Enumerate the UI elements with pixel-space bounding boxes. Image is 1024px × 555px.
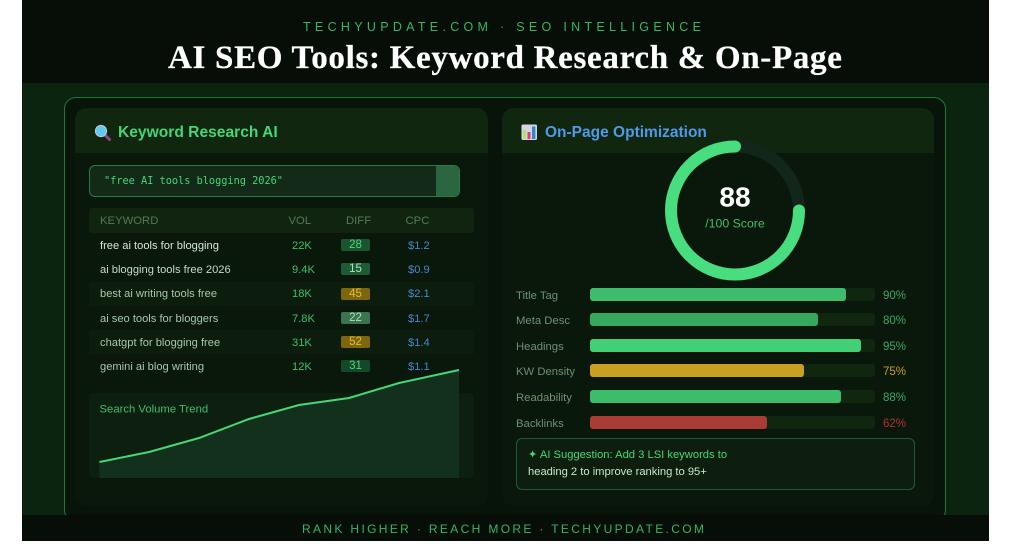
metric: kw density: [516, 364, 906, 378]
trend chart: [99, 369, 460, 478]
search box: [89, 165, 460, 197]
ai suggestion callout: ✦ AI Suggestion: Add 3 LSI keywords to: [528, 449, 727, 461]
search button: [436, 166, 459, 196]
row 4: $1.7: [408, 313, 430, 325]
background: [22, 83, 988, 515]
trend chart: Search Volume Trend: [100, 404, 208, 416]
outer dashboard frame: [64, 97, 946, 522]
row 5: [89, 330, 474, 354]
row 6: $1.1: [408, 361, 430, 373]
poster: KW Density: [516, 366, 575, 378]
poster: 90%: [883, 290, 906, 302]
row 4: 7.8K: [292, 313, 315, 325]
row 3: $2.1: [408, 288, 430, 300]
row 3: [89, 282, 474, 306]
panel: keyword research: [75, 108, 488, 506]
score gauge: /100 Score: [705, 216, 765, 230]
row 3: 45: [349, 288, 362, 300]
header band: [22, 0, 988, 83]
panel header: [502, 108, 934, 153]
row 3: best ai writing tools free: [100, 288, 217, 300]
search query: "free AI tools blogging 2026": [104, 175, 283, 187]
table header: VOL: [288, 214, 311, 226]
footer text: RANK HIGHER · REACH MORE · TECHYUPDATE.COM: [302, 522, 706, 536]
row 6: 31: [349, 360, 362, 372]
poster: Title Tag: [516, 290, 558, 302]
row 4: [100, 312, 430, 325]
icon: magnifier: [94, 124, 111, 141]
row 2: 15: [349, 263, 362, 275]
metric: meta desc: [516, 313, 906, 327]
metric: backlinks: [516, 416, 906, 430]
footer band: [22, 515, 988, 541]
table header: DIFF: [346, 214, 371, 226]
row 5: chatgpt for blogging free: [100, 337, 220, 349]
heading: keyword research: Keyword Research AI: [118, 124, 278, 141]
panel: on-page optimization: [502, 108, 934, 506]
row 2: $0.9: [408, 264, 430, 276]
row 6: gemini ai blog writing: [100, 361, 204, 373]
table header: KEYWORD: [100, 214, 158, 226]
score gauge: 88: [719, 182, 751, 212]
poster: 62%: [883, 418, 906, 430]
row 2: ai blogging tools free 2026: [100, 264, 231, 276]
metric: title tag: [516, 288, 906, 302]
icon: bar chart: [522, 124, 537, 140]
poster: 95%: [883, 341, 906, 353]
panel header: [75, 108, 488, 153]
row 6: [100, 360, 430, 373]
ai suggestion callout: heading 2 to improve ranking to 95+: [528, 466, 707, 478]
row 1: 22K: [292, 240, 312, 252]
poster: 75%: [883, 366, 906, 378]
row 5: 31K: [292, 337, 312, 349]
row 2: 9.4K: [292, 264, 315, 276]
poster: 88%: [883, 392, 906, 404]
score gauge: [665, 140, 805, 280]
row 5: $1.4: [408, 337, 430, 349]
poster: Headings: [516, 341, 564, 353]
poster: 80%: [883, 315, 906, 327]
table header: CPC: [406, 214, 429, 226]
eyebrow text: TECHYUPDATE.COM · SEO INTELLIGENCE: [303, 20, 705, 34]
row 4: ai seo tools for bloggers: [100, 313, 218, 325]
table header: [89, 208, 474, 233]
metric: headings: [516, 339, 906, 353]
row 3: 18K: [292, 288, 312, 300]
row 2: [100, 263, 430, 276]
row 1: free ai tools for blogging: [100, 240, 219, 252]
heading: on-page: On-Page Optimization: [545, 124, 707, 141]
ai suggestion callout: [516, 438, 915, 490]
row 1: $1.2: [408, 240, 430, 252]
row 6: 12K: [292, 361, 312, 373]
poster: Backlinks: [516, 418, 564, 430]
title: AI SEO Tools: Keyword Research & On-Page: [168, 40, 843, 76]
poster: Readability: [516, 392, 572, 404]
row 1: 28: [349, 239, 362, 251]
metric: readability: [516, 390, 906, 404]
row 4: 22: [349, 312, 362, 324]
row 5: 52: [349, 336, 362, 348]
poster: Meta Desc: [516, 315, 570, 327]
row 1: [100, 239, 430, 252]
